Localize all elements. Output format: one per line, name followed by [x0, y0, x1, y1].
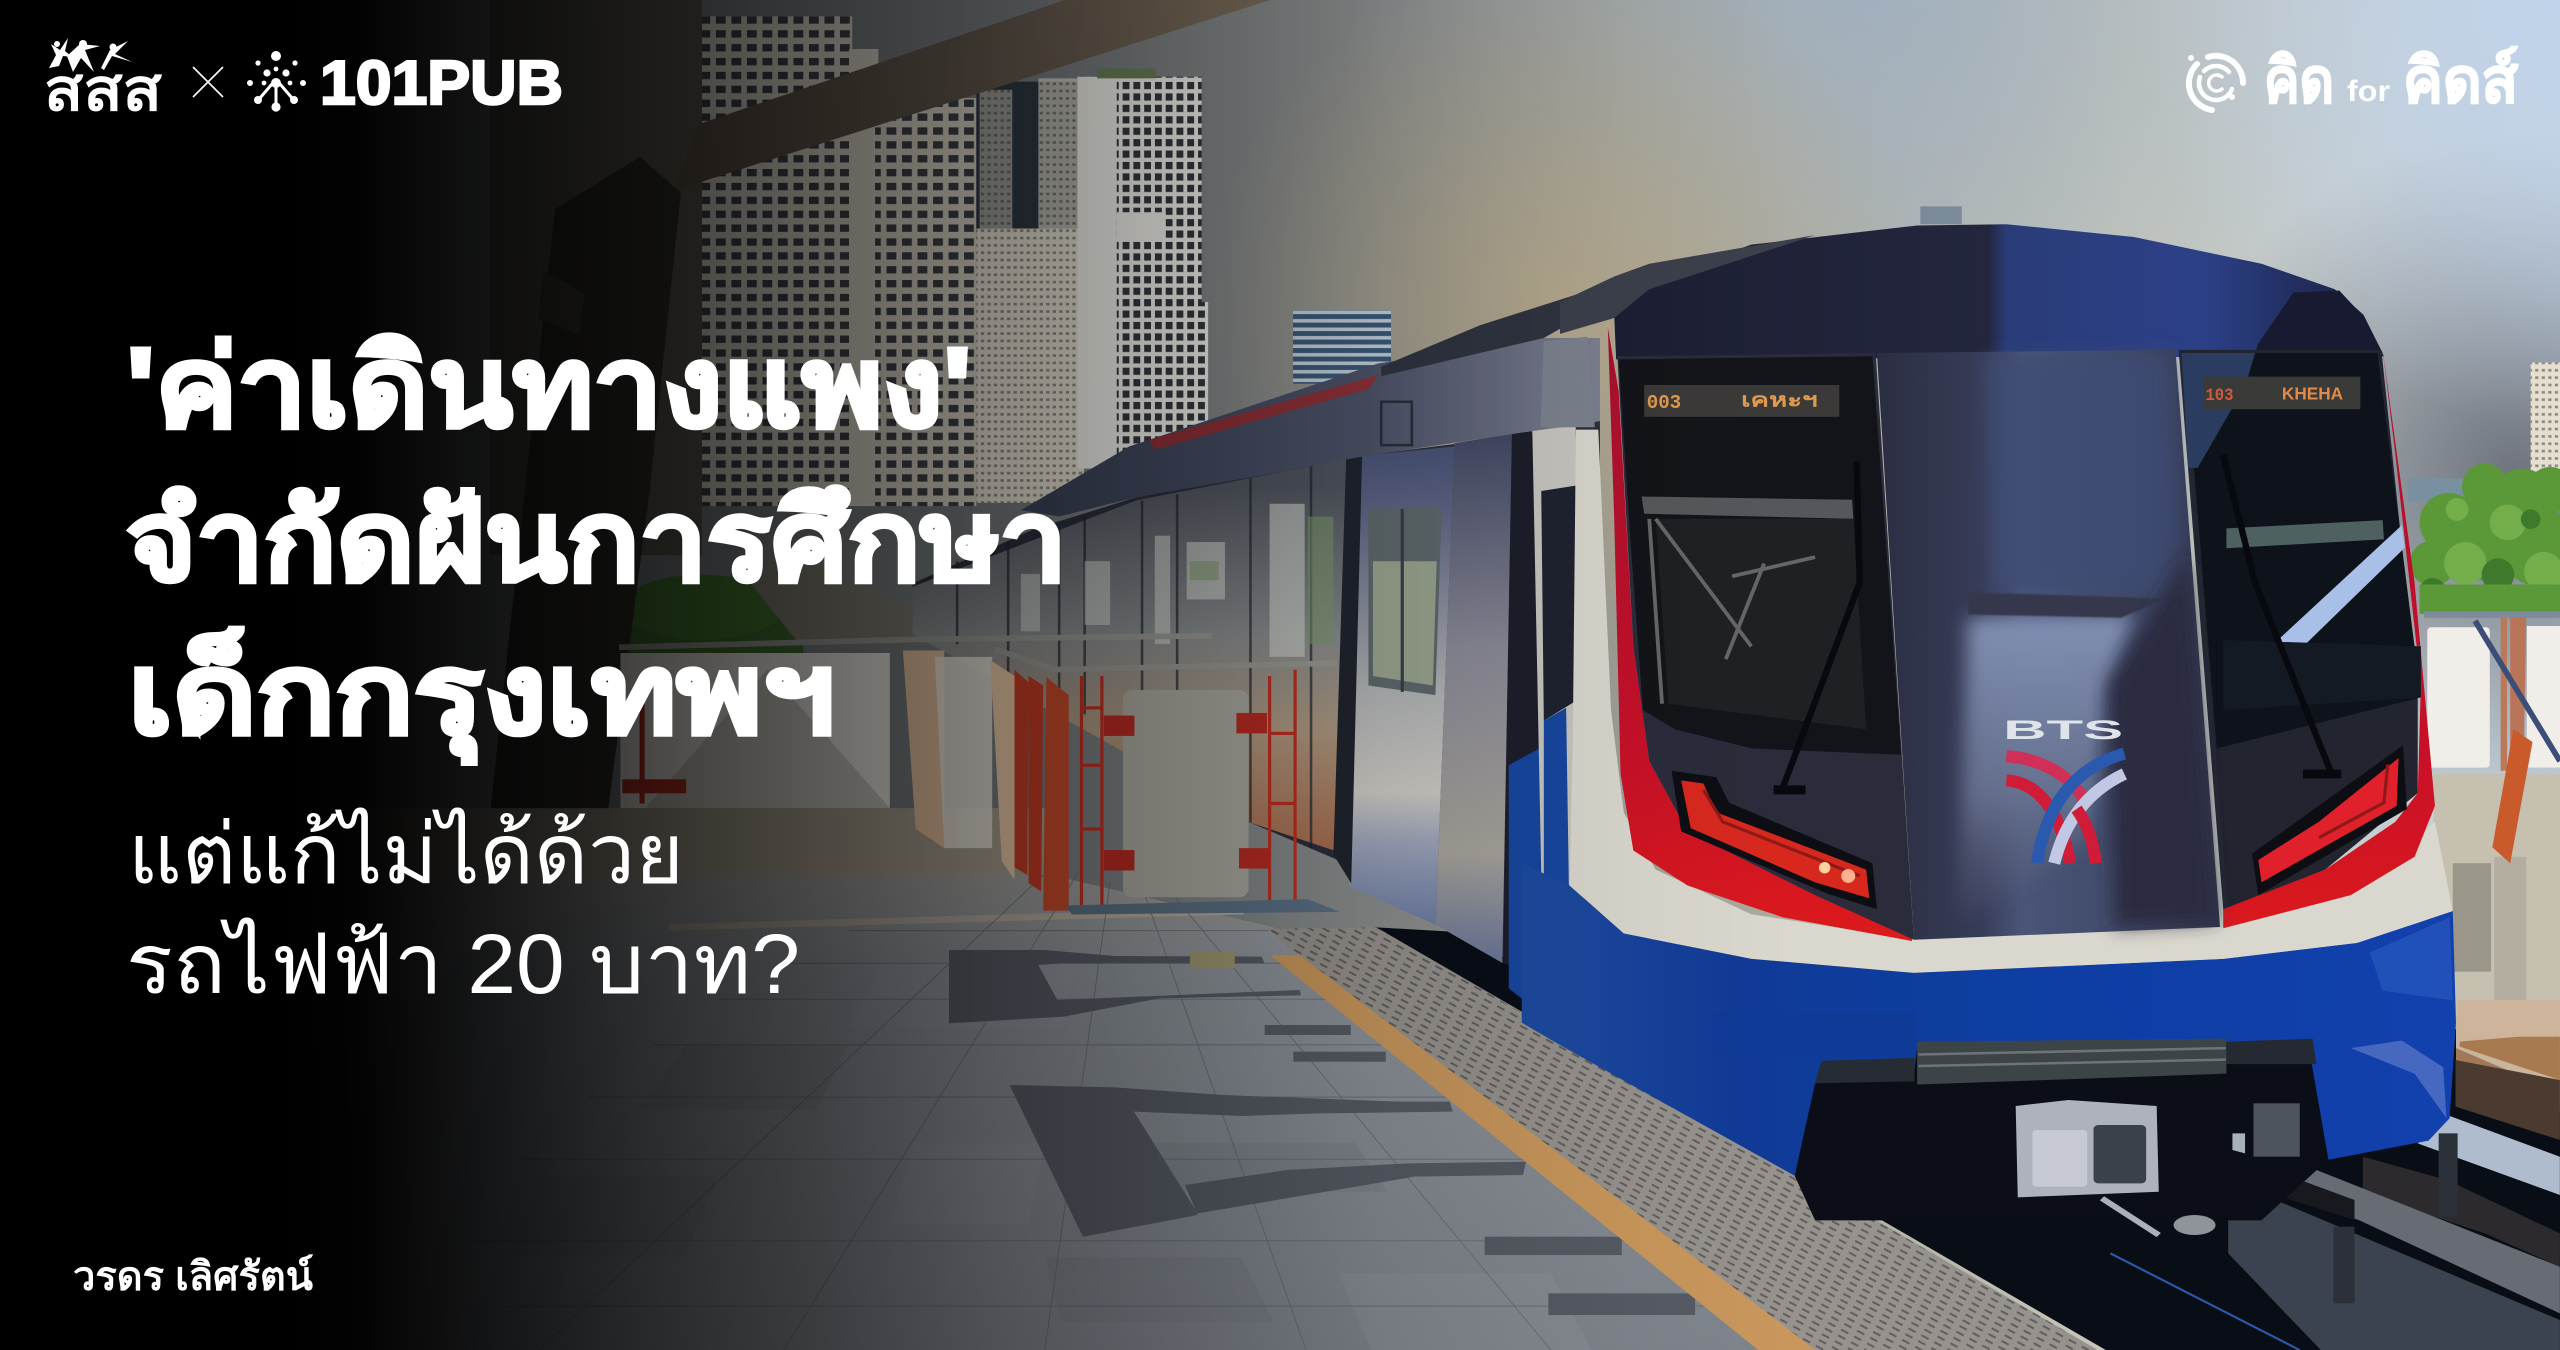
logo: สสส with three figures: สสส	[44, 58, 163, 123]
author name: วรดร เลิศรัตน์	[73, 1254, 313, 1299]
white stripe	[1570, 430, 2453, 973]
title: main heading: เด็กกรุงเทพฯ	[128, 627, 835, 765]
title: main heading	[126, 325, 1067, 765]
station structure: roof beam and column	[490, 0, 1270, 816]
right side background: concrete, rails and fence	[2424, 613, 2560, 1112]
right windscreen: KHEHA	[2282, 384, 2343, 404]
orange platform edge line	[1270, 955, 1816, 1350]
left windscreen: 003	[1647, 392, 1681, 414]
platform floor with tiles	[0, 873, 1780, 1350]
BTS wordmark: BTS	[2003, 715, 2123, 745]
back platform floor and panels	[327, 653, 1045, 906]
logo: 101PUB wordmark: 101PUB	[320, 49, 563, 118]
logo: คิด for คิดส์: คิด	[2264, 47, 2334, 116]
left face panel	[1617, 353, 1914, 940]
left windscreen: เคหะฯ	[1741, 391, 1818, 412]
trackbed under train	[1376, 927, 2560, 1350]
tactile safety strip	[1267, 927, 2098, 1350]
right tail light	[2252, 745, 2407, 895]
right face panel	[2179, 350, 2418, 909]
BTS logo mark	[2006, 754, 2124, 863]
train: front of the BTS car	[1522, 206, 2456, 1220]
blue lower body	[1522, 863, 2456, 1176]
train: roof band	[1021, 338, 1600, 517]
logo: คิด for คิดส์: for	[2347, 75, 2390, 108]
centre door	[1877, 350, 2220, 940]
front bumper	[1815, 1039, 2316, 1085]
undercarriage	[1795, 1055, 2332, 1220]
subtitle: รถไฟฟ้า 20 บาท?	[126, 917, 800, 1011]
centre door reflections	[1959, 353, 2217, 927]
windshield wipers	[1774, 455, 2341, 790]
logo: 101PUB burst icon	[247, 51, 306, 112]
station fence: railings, red posts and gate	[619, 636, 1340, 914]
title: main heading: จำกัดฝันการศึกษา	[126, 479, 1067, 604]
train: side doors	[1333, 426, 1585, 1020]
floor mosaic pattern	[949, 950, 1695, 1315]
title: main heading: 'ค่าเดินทางแพง'	[126, 325, 972, 450]
background: green trees	[620, 464, 2560, 702]
roof dome	[1614, 224, 2384, 359]
logo icon: concentric circle	[2188, 56, 2243, 110]
subtitle: แต่แก้ไม่ได้ด้วย	[128, 807, 684, 901]
left tail light	[1672, 771, 1877, 909]
rail guard and concrete trough	[2110, 1000, 2560, 1350]
red curves	[1608, 328, 1912, 941]
subtitle	[126, 807, 800, 1011]
logo: คิด for คิดส์: คิดส์	[2403, 46, 2518, 116]
coupler box under train	[2016, 1100, 2300, 1235]
right windscreen: 103	[2205, 386, 2233, 406]
left windscreen	[1619, 356, 1901, 755]
train: side carriages	[912, 287, 1600, 1020]
background: high-rise buildings	[490, 0, 2560, 555]
logo separator ×	[193, 67, 223, 97]
logo: คิด for คิดส์	[2188, 46, 2518, 116]
right windscreen	[2182, 353, 2421, 748]
logo: สสส with three figures	[44, 38, 163, 123]
